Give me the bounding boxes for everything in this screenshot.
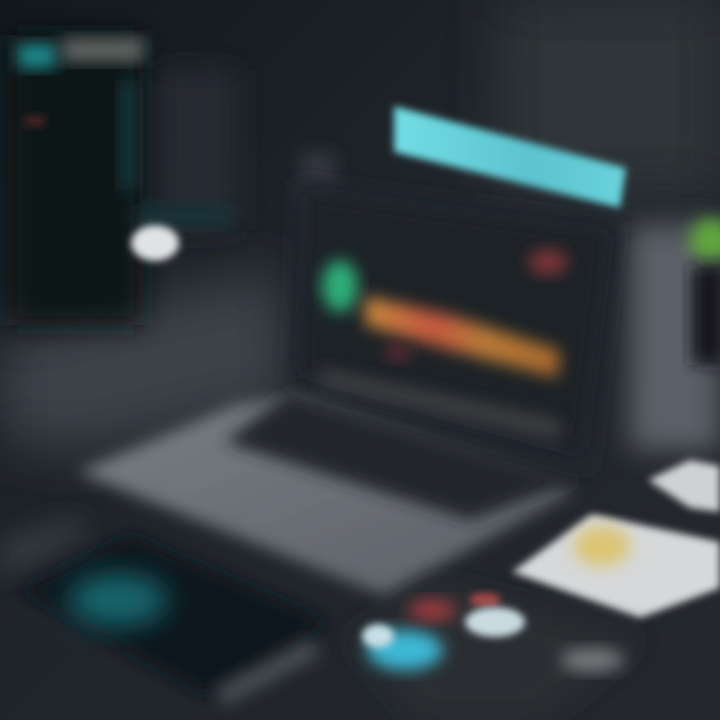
icon: plant and pot bbox=[690, 218, 720, 365]
panel: second dashboard column bbox=[135, 70, 238, 230]
left panel teal stripe bbox=[120, 80, 138, 190]
right wall bbox=[500, 0, 720, 190]
callout: cyan banner bbox=[394, 106, 626, 208]
tablet teal glow bbox=[68, 574, 168, 626]
white tile right edge bbox=[648, 460, 720, 512]
panel: tablet bottom left bbox=[20, 535, 330, 705]
icon: red small blob bbox=[469, 593, 501, 607]
keyboard bbox=[225, 392, 580, 520]
left panel header grey bbox=[62, 38, 144, 62]
desk surface haze bbox=[0, 270, 290, 450]
right wall panel bbox=[630, 225, 720, 450]
chart: green marker bbox=[322, 260, 358, 312]
panel: laptop screen bbox=[288, 178, 620, 472]
chart: red small bbox=[384, 343, 412, 361]
left panel header teal bbox=[18, 44, 56, 68]
icon: white blob bbox=[465, 607, 525, 637]
icon: grey blob bbox=[560, 648, 624, 672]
left panel rows bbox=[25, 115, 45, 127]
chart: orange band bbox=[365, 296, 560, 378]
chart row lower bbox=[320, 368, 560, 440]
icon: red blob bbox=[408, 599, 456, 621]
icon: pale blob bbox=[362, 624, 394, 648]
panel: small phone cards bbox=[350, 585, 640, 720]
panel: white card right bbox=[512, 514, 720, 618]
laptop back grey bbox=[300, 152, 336, 207]
icon: yellow dot bbox=[574, 526, 630, 566]
icon: cyan blob bbox=[367, 630, 443, 670]
laptop base bbox=[78, 395, 575, 596]
left strip light bbox=[0, 520, 90, 575]
panel: left dark dashboard bbox=[8, 35, 144, 325]
chart: red marker bbox=[528, 249, 568, 275]
icon: white blob bbox=[131, 225, 179, 261]
tablet grey edge bbox=[215, 640, 320, 705]
